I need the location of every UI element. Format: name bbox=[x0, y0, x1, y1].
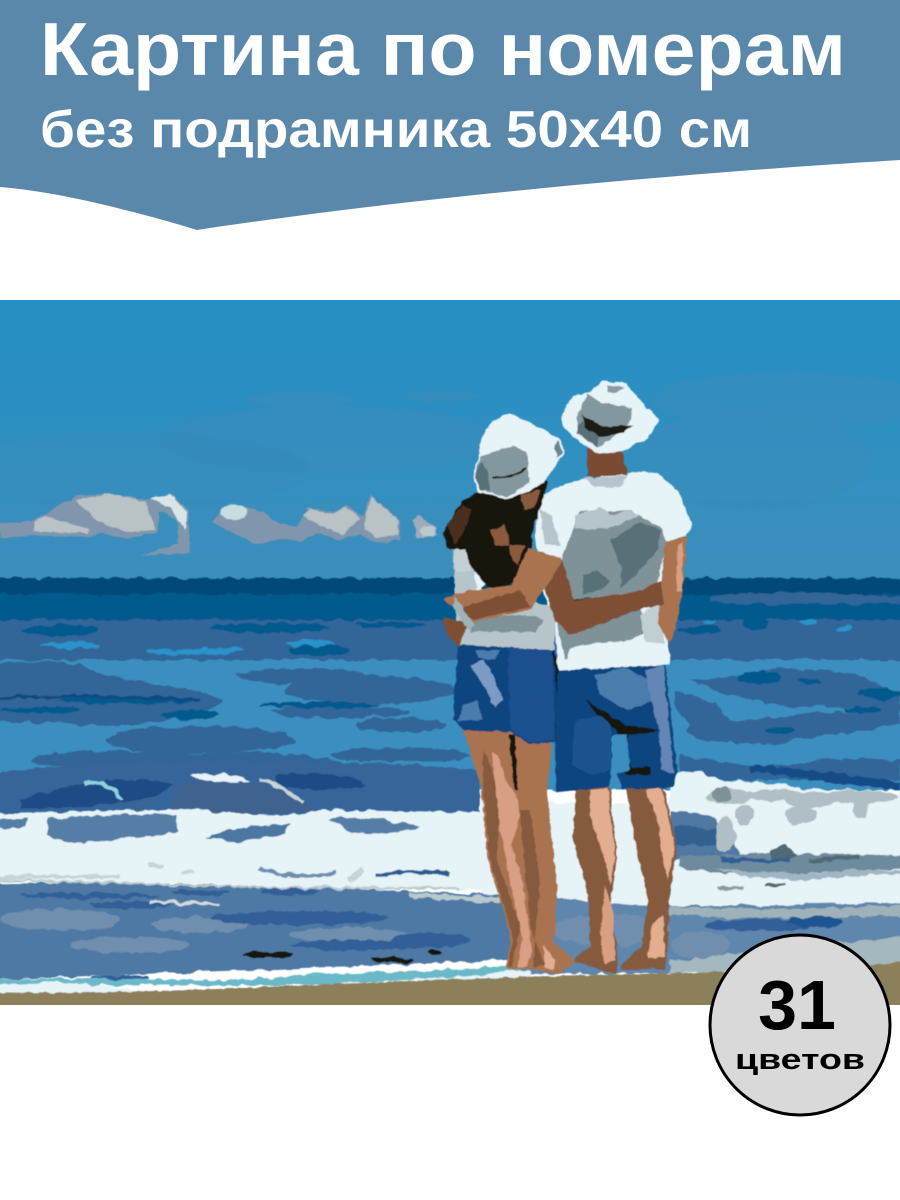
embracing arms bbox=[443, 550, 662, 647]
woman legs bbox=[465, 728, 573, 972]
woman hat bbox=[475, 415, 562, 497]
badge label: цветов bbox=[735, 1044, 865, 1076]
woman shorts bbox=[455, 645, 557, 742]
man hat bbox=[563, 383, 657, 452]
badge: 31 colours bbox=[710, 935, 890, 1115]
header banner bbox=[0, 0, 900, 230]
woman shirt bbox=[453, 540, 555, 648]
lower wash bbox=[0, 880, 900, 1000]
man shorts bbox=[557, 663, 675, 790]
man shirt bbox=[537, 474, 690, 668]
foam bbox=[0, 770, 900, 905]
breaking waves bbox=[0, 760, 481, 817]
clouds bbox=[0, 493, 437, 555]
man legs bbox=[575, 788, 675, 972]
black gap bbox=[552, 650, 559, 741]
woman hair bbox=[445, 482, 545, 590]
man neck bbox=[587, 448, 628, 477]
subtitle: без подрамника 50х40 см bbox=[40, 101, 752, 159]
sand bbox=[0, 960, 900, 1005]
badge number: 31 bbox=[758, 966, 836, 1044]
man right arm bbox=[660, 538, 685, 640]
title: Картина по номерам bbox=[40, 7, 846, 91]
couple figures bbox=[443, 383, 690, 972]
painting: couple on the beach bbox=[0, 300, 900, 1025]
sea bbox=[0, 578, 900, 790]
sky bbox=[0, 300, 900, 585]
